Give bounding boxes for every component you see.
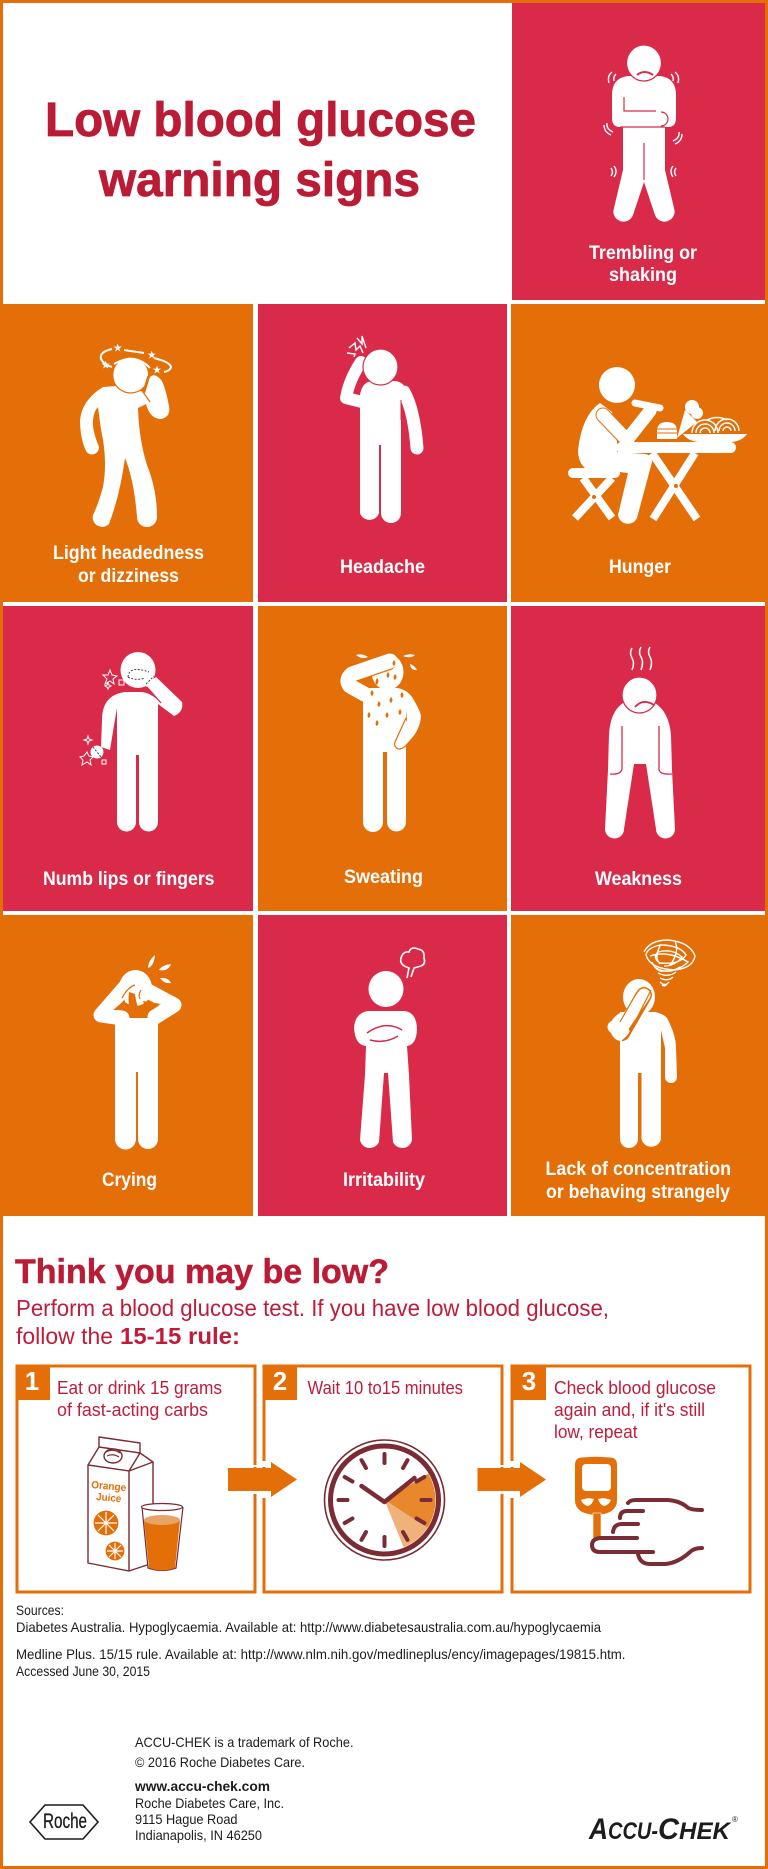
logo: Accu-Chek: A: [588, 1813, 608, 1846]
icon: confused figure: [610, 940, 695, 1148]
logo: Accu-Chek: CCU-: [608, 1818, 658, 1845]
logo: Roche: Roche: [43, 1810, 87, 1833]
footer text: 9115 Hague Road: [135, 1811, 238, 1827]
footer text: Indianapolis, IN 46250: [135, 1827, 262, 1843]
panel: sweating: [258, 606, 507, 911]
logo: Roche: [30, 1805, 98, 1839]
step 3: Check blood glucose: [554, 1378, 716, 1398]
step 1: of fast-acting carbs: [57, 1400, 208, 1420]
panel: headache: [258, 304, 507, 602]
icon: juice carton and glass: Juice: [96, 1491, 122, 1505]
sources: [16, 1602, 626, 1679]
icon: juice carton and glass: Orange: [91, 1479, 127, 1494]
label: lack of concentration: Lack of concentration: [546, 1159, 731, 1180]
step 2: 2: [273, 1366, 287, 1396]
step 3: [511, 1365, 750, 1592]
label: lack of concentration: or behaving strangely: [546, 1182, 730, 1203]
panel: crying: [0, 915, 253, 1216]
step 2: [263, 1365, 502, 1592]
heading: think you may be low: Think you may be low?: [15, 1253, 389, 1291]
step 2: Wait 10 to15 minutes: [308, 1378, 463, 1398]
footer text: Roche Diabetes Care, Inc.: [135, 1795, 284, 1811]
logo: Accu-Chek: HEK: [679, 1818, 732, 1845]
sources: Medline Plus. 15/15 rule. Available at: http://www.nlm.nih.gov/medlineplus/ency/imagepages/19815.htm.: [16, 1646, 626, 1662]
label: weakness: Weakness: [595, 869, 682, 890]
icon: glucose meter and hand: [575, 1457, 702, 1564]
label: trembling: Trembling or: [589, 243, 698, 264]
step 1: [16, 1365, 255, 1592]
label: lack of concentration: [546, 1159, 731, 1203]
step 1: 1: [25, 1366, 39, 1396]
label: numb: Numb lips or fingers: [43, 869, 214, 890]
panel: weakness: [511, 606, 765, 911]
icon: irritable figure: [354, 948, 425, 1148]
panel: lack of concentration: [511, 915, 768, 1216]
label: light headedness: or dizziness: [78, 566, 179, 587]
step 3: again and, if it's still: [554, 1400, 705, 1420]
icon: crying figure: [101, 955, 174, 1150]
icon: dizzy figure: [80, 344, 171, 527]
label: trembling: shaking: [609, 265, 677, 286]
icon: juice carton and glass: [88, 1437, 183, 1571]
intro text: follow the: [16, 1323, 113, 1349]
footer text: ACCU-CHEK is a trademark of Roche.: [135, 1734, 354, 1750]
panel: trembling or shaking: [512, 3, 765, 300]
arrow: step 1 to 2: [228, 1462, 297, 1497]
footer text: © 2016 Roche Diabetes Care.: [135, 1754, 305, 1770]
title: [45, 94, 476, 207]
step 3: 3: [522, 1366, 536, 1396]
sources: Diabetes Australia. Hypoglycaemia. Available at: http://www.diabetesaustralia.com.au/hypoglycaemia: [16, 1619, 601, 1635]
intro text: 15-15 rule:: [120, 1323, 240, 1349]
logo: Accu-Chek: C: [658, 1813, 680, 1846]
panel: irritability: [258, 915, 507, 1216]
footer text: [134, 1734, 354, 1843]
logo: Accu-Chek: ®: [732, 1815, 738, 1824]
label: light headedness: [53, 543, 204, 587]
icon: trembling figure: [604, 45, 682, 222]
label: crying: Crying: [102, 1170, 157, 1191]
label: headache: Headache: [340, 557, 425, 578]
icon: headache figure: [346, 336, 417, 523]
logo: Accu-Chek: [588, 1813, 738, 1846]
panel: hunger: [511, 304, 768, 602]
icon: clock: [324, 1440, 444, 1560]
intro text: Perform a blood glucose test. If you have low blood glucose,: [16, 1295, 609, 1321]
label: light headedness: Light headedness: [53, 543, 204, 564]
label: irritability: Irritability: [343, 1170, 425, 1191]
panel: numb lips or fingers: [3, 606, 253, 911]
label: sweating: Sweating: [344, 867, 423, 888]
sources: Accessed June 30, 2015: [16, 1663, 150, 1679]
title: Low blood glucose: [45, 94, 476, 147]
title: warning signs: [98, 154, 420, 207]
intro text: [16, 1295, 609, 1349]
label: hunger: Hunger: [609, 557, 672, 578]
arrow: step 2 to 3: [478, 1462, 546, 1497]
footer text: www.accu-chek.com: [134, 1778, 270, 1794]
step 3: low, repeat: [554, 1422, 638, 1442]
label: trembling: [589, 243, 698, 286]
icon: weakness figure: [605, 647, 675, 838]
icon: sweating figure: [348, 654, 421, 832]
icon: numb figure: [80, 652, 182, 832]
sources: Sources:: [16, 1602, 64, 1618]
icon: hunger figure at table: [568, 367, 747, 524]
panel: light headedness: [0, 304, 253, 602]
step 1: Eat or drink 15 grams: [57, 1378, 222, 1398]
